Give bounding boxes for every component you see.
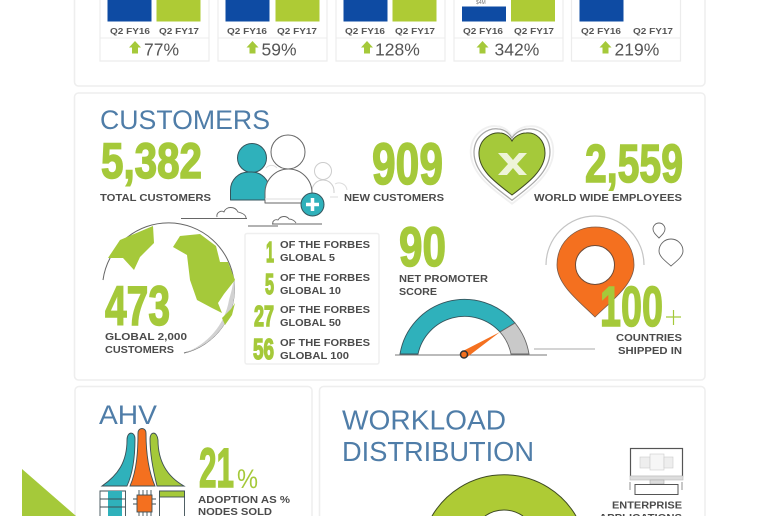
stat: employees: 2,559 bbox=[585, 134, 683, 194]
stat: adoption: % bbox=[237, 464, 258, 494]
panel: forbes list: OF THE FORBES bbox=[280, 273, 370, 284]
decorative green triangle bbox=[22, 469, 76, 516]
panel: forbes list: GLOBAL 100 bbox=[280, 351, 349, 362]
growth card 5: Q2 FY16 bbox=[581, 26, 621, 36]
stat: employees: WORLD WIDE EMPLOYEES bbox=[534, 193, 682, 204]
growth card 2: Q2 FY17 bbox=[277, 26, 317, 36]
stat: net promoter score bbox=[399, 215, 489, 298]
growth card 3 bbox=[336, 0, 445, 61]
chart: donut bbox=[432, 475, 576, 516]
icon: customers group bbox=[181, 135, 347, 226]
panel: forbes list: OF THE FORBES bbox=[280, 240, 370, 251]
growth card 4: 342% bbox=[494, 40, 539, 60]
growth card 5: Q2 FY17 bbox=[633, 26, 673, 36]
stat: employees bbox=[534, 134, 683, 204]
stat: adoption: ADOPTION AS % bbox=[198, 495, 290, 506]
icon: heart logo bbox=[471, 126, 553, 204]
growth card 3: 128% bbox=[375, 40, 420, 60]
heading: workload distribution: WORKLOAD bbox=[342, 404, 506, 436]
growth card 4: Q2 FY16 bbox=[463, 26, 503, 36]
stat: global 2000: CUSTOMERS bbox=[105, 345, 174, 356]
icon: chip bbox=[133, 490, 156, 516]
label: enterprise applications bbox=[599, 500, 682, 516]
panel: forbes list: GLOBAL 10 bbox=[280, 286, 341, 297]
chart: gauge bbox=[395, 299, 595, 358]
label: enterprise applications: ENTERPRISE bbox=[612, 500, 682, 512]
growth card 3: Q2 FY17 bbox=[395, 26, 435, 36]
heading: workload distribution: DISTRIBUTION bbox=[342, 436, 534, 467]
stat: global 2000 bbox=[105, 274, 188, 356]
stat: net promoter score: SCORE bbox=[399, 287, 437, 298]
stat: adoption: 21 bbox=[199, 436, 234, 499]
growth card 4 bbox=[454, 0, 563, 61]
icon: location pin bbox=[546, 216, 683, 317]
growth card 3: Q2 FY16 bbox=[345, 26, 385, 36]
stat: total customers: TOTAL CUSTOMERS bbox=[100, 193, 211, 204]
growth card 5 bbox=[572, 0, 680, 61]
panel: forbes list: OF THE FORBES bbox=[280, 305, 370, 316]
growth card 4: Q2 FY17 bbox=[514, 26, 554, 36]
stat: new customers: NEW CUSTOMERS bbox=[344, 193, 444, 204]
growth card 1 bbox=[100, 0, 209, 61]
growth card 2: Q2 FY16 bbox=[227, 26, 267, 36]
panel: forbes list: OF THE FORBES bbox=[280, 338, 370, 349]
growth card 4: $4M bbox=[476, 0, 486, 6]
growth card 2: 59% bbox=[262, 40, 297, 60]
panel: forbes list bbox=[245, 234, 379, 366]
growth card 5: 219% bbox=[614, 40, 659, 60]
stat: total customers: 5,382 bbox=[101, 133, 202, 189]
stat: countries: SHIPPED IN bbox=[618, 346, 682, 357]
stat: countries: COUNTRIES bbox=[616, 333, 682, 344]
stat: countries bbox=[600, 275, 682, 357]
stat: adoption bbox=[198, 436, 290, 516]
panel: AHV bbox=[75, 386, 312, 516]
panel: customers bbox=[74, 93, 705, 380]
panel: forbes list: 27 bbox=[254, 301, 274, 333]
icon: plus badge bbox=[301, 193, 324, 216]
icon: globe bbox=[103, 223, 235, 356]
panel: forbes list: GLOBAL 5 bbox=[280, 253, 335, 264]
stat: global 2000: 473 bbox=[105, 274, 170, 337]
panel: forbes list: 56 bbox=[253, 334, 274, 366]
icon: AHV peaks bbox=[100, 428, 184, 516]
stat: global 2000: GLOBAL 2,000 bbox=[105, 332, 188, 343]
stat: net promoter score: 90 bbox=[399, 215, 446, 278]
panel: workload distribution bbox=[320, 386, 705, 516]
icon: storage table bbox=[100, 491, 126, 516]
panel: forbes list: GLOBAL 50 bbox=[280, 318, 341, 329]
icon: window bbox=[160, 491, 184, 516]
growth card 1: Q2 FY16 bbox=[110, 26, 150, 36]
stat: net promoter score: NET PROMOTER bbox=[399, 274, 489, 285]
growth card 1: 77% bbox=[144, 40, 179, 60]
stat: new customers bbox=[344, 132, 444, 204]
gauge needle bbox=[460, 332, 500, 358]
panel: forbes list: 1 bbox=[266, 237, 274, 269]
heading: workload distribution bbox=[342, 404, 534, 467]
panel: forbes list: 5 bbox=[265, 269, 274, 301]
growth card 2 bbox=[218, 0, 327, 61]
heading: AHV: AHV bbox=[99, 400, 157, 430]
growth card 1: Q2 FY17 bbox=[159, 26, 199, 36]
heading: customers: CUSTOMERS bbox=[100, 105, 270, 135]
stat: countries: 100 bbox=[600, 275, 663, 339]
stat: new customers: 909 bbox=[372, 132, 443, 197]
icon: enterprise applications bbox=[630, 448, 683, 494]
panel: quarterly growth bbox=[74, 0, 705, 86]
